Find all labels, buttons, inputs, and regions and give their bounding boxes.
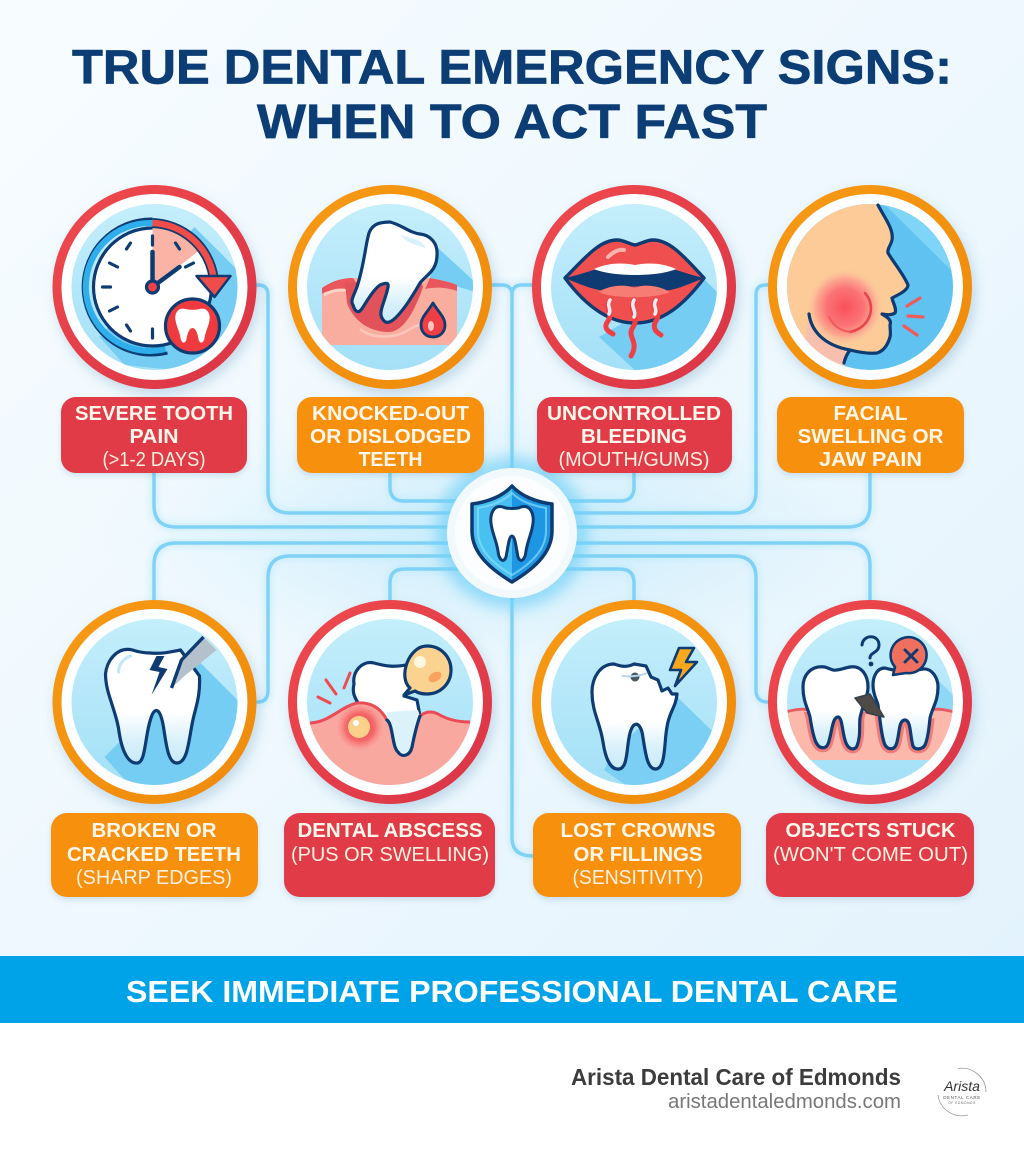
- label: facial swelling or jaw pain: SWELLING OR: [798, 426, 944, 448]
- label: knocked-out or dislodged teeth: TEETH: [358, 449, 422, 471]
- label: broken or cracked teeth: (SHARP EDGES): [76, 867, 232, 889]
- label: knocked-out or dislodged teeth: [297, 397, 484, 473]
- label: lost crowns or fillings: OR FILLINGS: [574, 844, 702, 866]
- footer clinic name: aristadentaledmonds.com: [668, 1091, 901, 1113]
- label: facial swelling or jaw pain: [777, 397, 964, 473]
- label: severe tooth pain: SEVERE TOOTH: [75, 403, 233, 425]
- icon: cracked tooth with tool: [52, 600, 256, 804]
- label: objects stuck: OBJECTS STUCK: [786, 820, 956, 842]
- title: TRUE DENTAL EMERGENCY SIGNS:: [72, 42, 952, 94]
- label: uncontrolled bleeding: UNCONTROLLED: [547, 403, 721, 425]
- icon: clock with tooth: [52, 185, 256, 389]
- icon: lips with blood: [532, 185, 744, 397]
- footer logo: [938, 1068, 986, 1116]
- panel: objects stuck: [766, 600, 974, 897]
- icon: dislodged tooth and gum: [288, 185, 492, 389]
- label: lost crowns or fillings: (SENSITIVITY): [572, 867, 704, 889]
- icon: tooth with abscess: [288, 600, 492, 804]
- central shield hub: [436, 457, 588, 609]
- panel: severe tooth pain: [52, 185, 256, 473]
- panel: knocked-out teeth: [288, 185, 492, 473]
- label: objects stuck: (WON'T COME OUT): [773, 844, 968, 866]
- panel: lost crowns or fillings: [532, 600, 741, 897]
- panel: broken or cracked teeth: [51, 600, 258, 897]
- label: facial swelling or jaw pain: FACIAL: [834, 403, 908, 425]
- label: objects stuck: [766, 813, 974, 897]
- footer clinic name: Arista Dental Care of Edmonds: [571, 1064, 901, 1090]
- icon: chipped tooth with bolt: [532, 600, 736, 812]
- label: broken or cracked teeth: BROKEN OR: [92, 820, 217, 842]
- label: lost crowns or fillings: LOST CROWNS: [560, 820, 716, 842]
- center glow: [92, 385, 932, 685]
- label: uncontrolled bleeding: BLEEDING: [581, 426, 687, 448]
- footer logo: Arista: [943, 1078, 980, 1094]
- icon: shield with tooth: [472, 486, 552, 582]
- footer logo: DENTAL CARE: [943, 1095, 981, 1100]
- label: severe tooth pain: (>1-2 DAYS): [102, 449, 206, 471]
- label: dental abscess: (PUS OR SWELLING): [291, 844, 489, 866]
- label: severe tooth pain: [61, 397, 247, 473]
- label: dental abscess: [284, 813, 495, 897]
- label: uncontrolled bleeding: [537, 397, 732, 473]
- icon: face profile with swelling: [768, 185, 972, 389]
- panel: dental abscess: [284, 600, 495, 897]
- panel: facial swelling or jaw pain: [768, 185, 972, 473]
- label: broken or cracked teeth: CRACKED TEETH: [67, 844, 241, 866]
- label: lost crowns or fillings: [533, 813, 741, 897]
- label: dental abscess: DENTAL ABSCESS: [298, 820, 482, 842]
- footer clinic name: [571, 1064, 901, 1113]
- label: knocked-out or dislodged teeth: OR DISLODGED: [310, 426, 471, 448]
- call-to-action banner: [0, 956, 1024, 1023]
- label: facial swelling or jaw pain: JAW PAIN: [819, 449, 922, 471]
- label: uncontrolled bleeding: (MOUTH/GUMS): [558, 449, 710, 471]
- icon: object between teeth: [768, 600, 972, 804]
- footer logo: OF EDMONDS: [948, 1101, 976, 1105]
- title: WHEN TO ACT FAST: [257, 96, 767, 149]
- label: broken or cracked teeth: [51, 813, 258, 897]
- label: severe tooth pain: PAIN: [130, 426, 178, 448]
- call-to-action banner: SEEK IMMEDIATE PROFESSIONAL DENTAL CARE: [126, 974, 898, 1009]
- panel: uncontrolled bleeding: [532, 185, 744, 473]
- footer background: [0, 1023, 1024, 1154]
- connector lines: [154, 285, 870, 856]
- label: knocked-out or dislodged teeth: KNOCKED-OUT: [312, 403, 469, 425]
- title: [72, 42, 952, 149]
